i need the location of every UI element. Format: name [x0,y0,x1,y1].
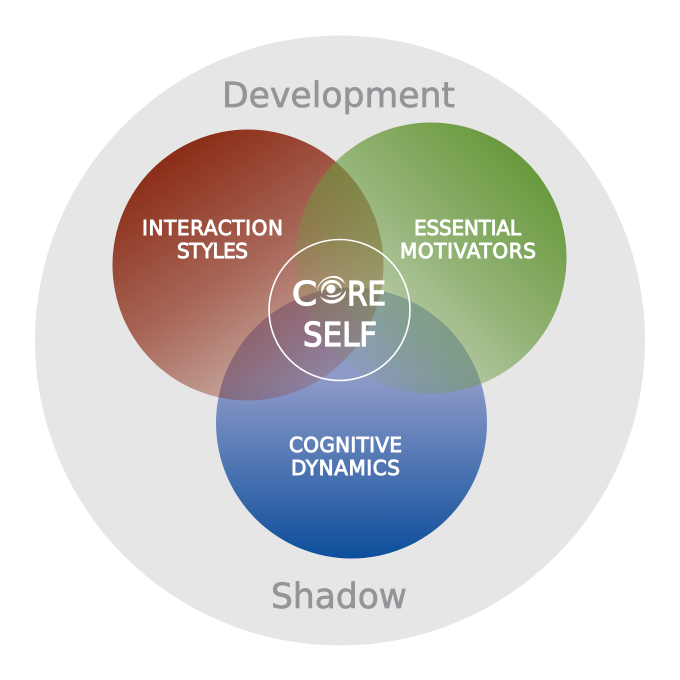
label: cognitive dynamics [289,433,402,480]
core self: RE [347,274,386,313]
label: cognitive dynamics: COGNITIVE [289,433,402,457]
circle: interaction styles [112,130,384,400]
circle: essential motivators [296,122,566,394]
icon: swirl [317,276,346,304]
core self: C [292,274,317,313]
heading: Development: Development [222,76,455,116]
label: essential motivators: MOTIVATORS [400,239,536,263]
core self [269,240,410,380]
label: interaction styles [142,216,283,263]
label: interaction styles: INTERACTION [142,216,283,240]
heading: Shadow: Shadow [271,577,407,617]
label: essential motivators [400,216,536,263]
label: cognitive dynamics: DYNAMICS [291,456,400,480]
circle: cognitive dynamics [216,288,487,558]
label: interaction styles: STYLES [177,239,248,263]
core self: SELF [303,315,377,354]
label: essential motivators: ESSENTIAL [414,216,522,240]
